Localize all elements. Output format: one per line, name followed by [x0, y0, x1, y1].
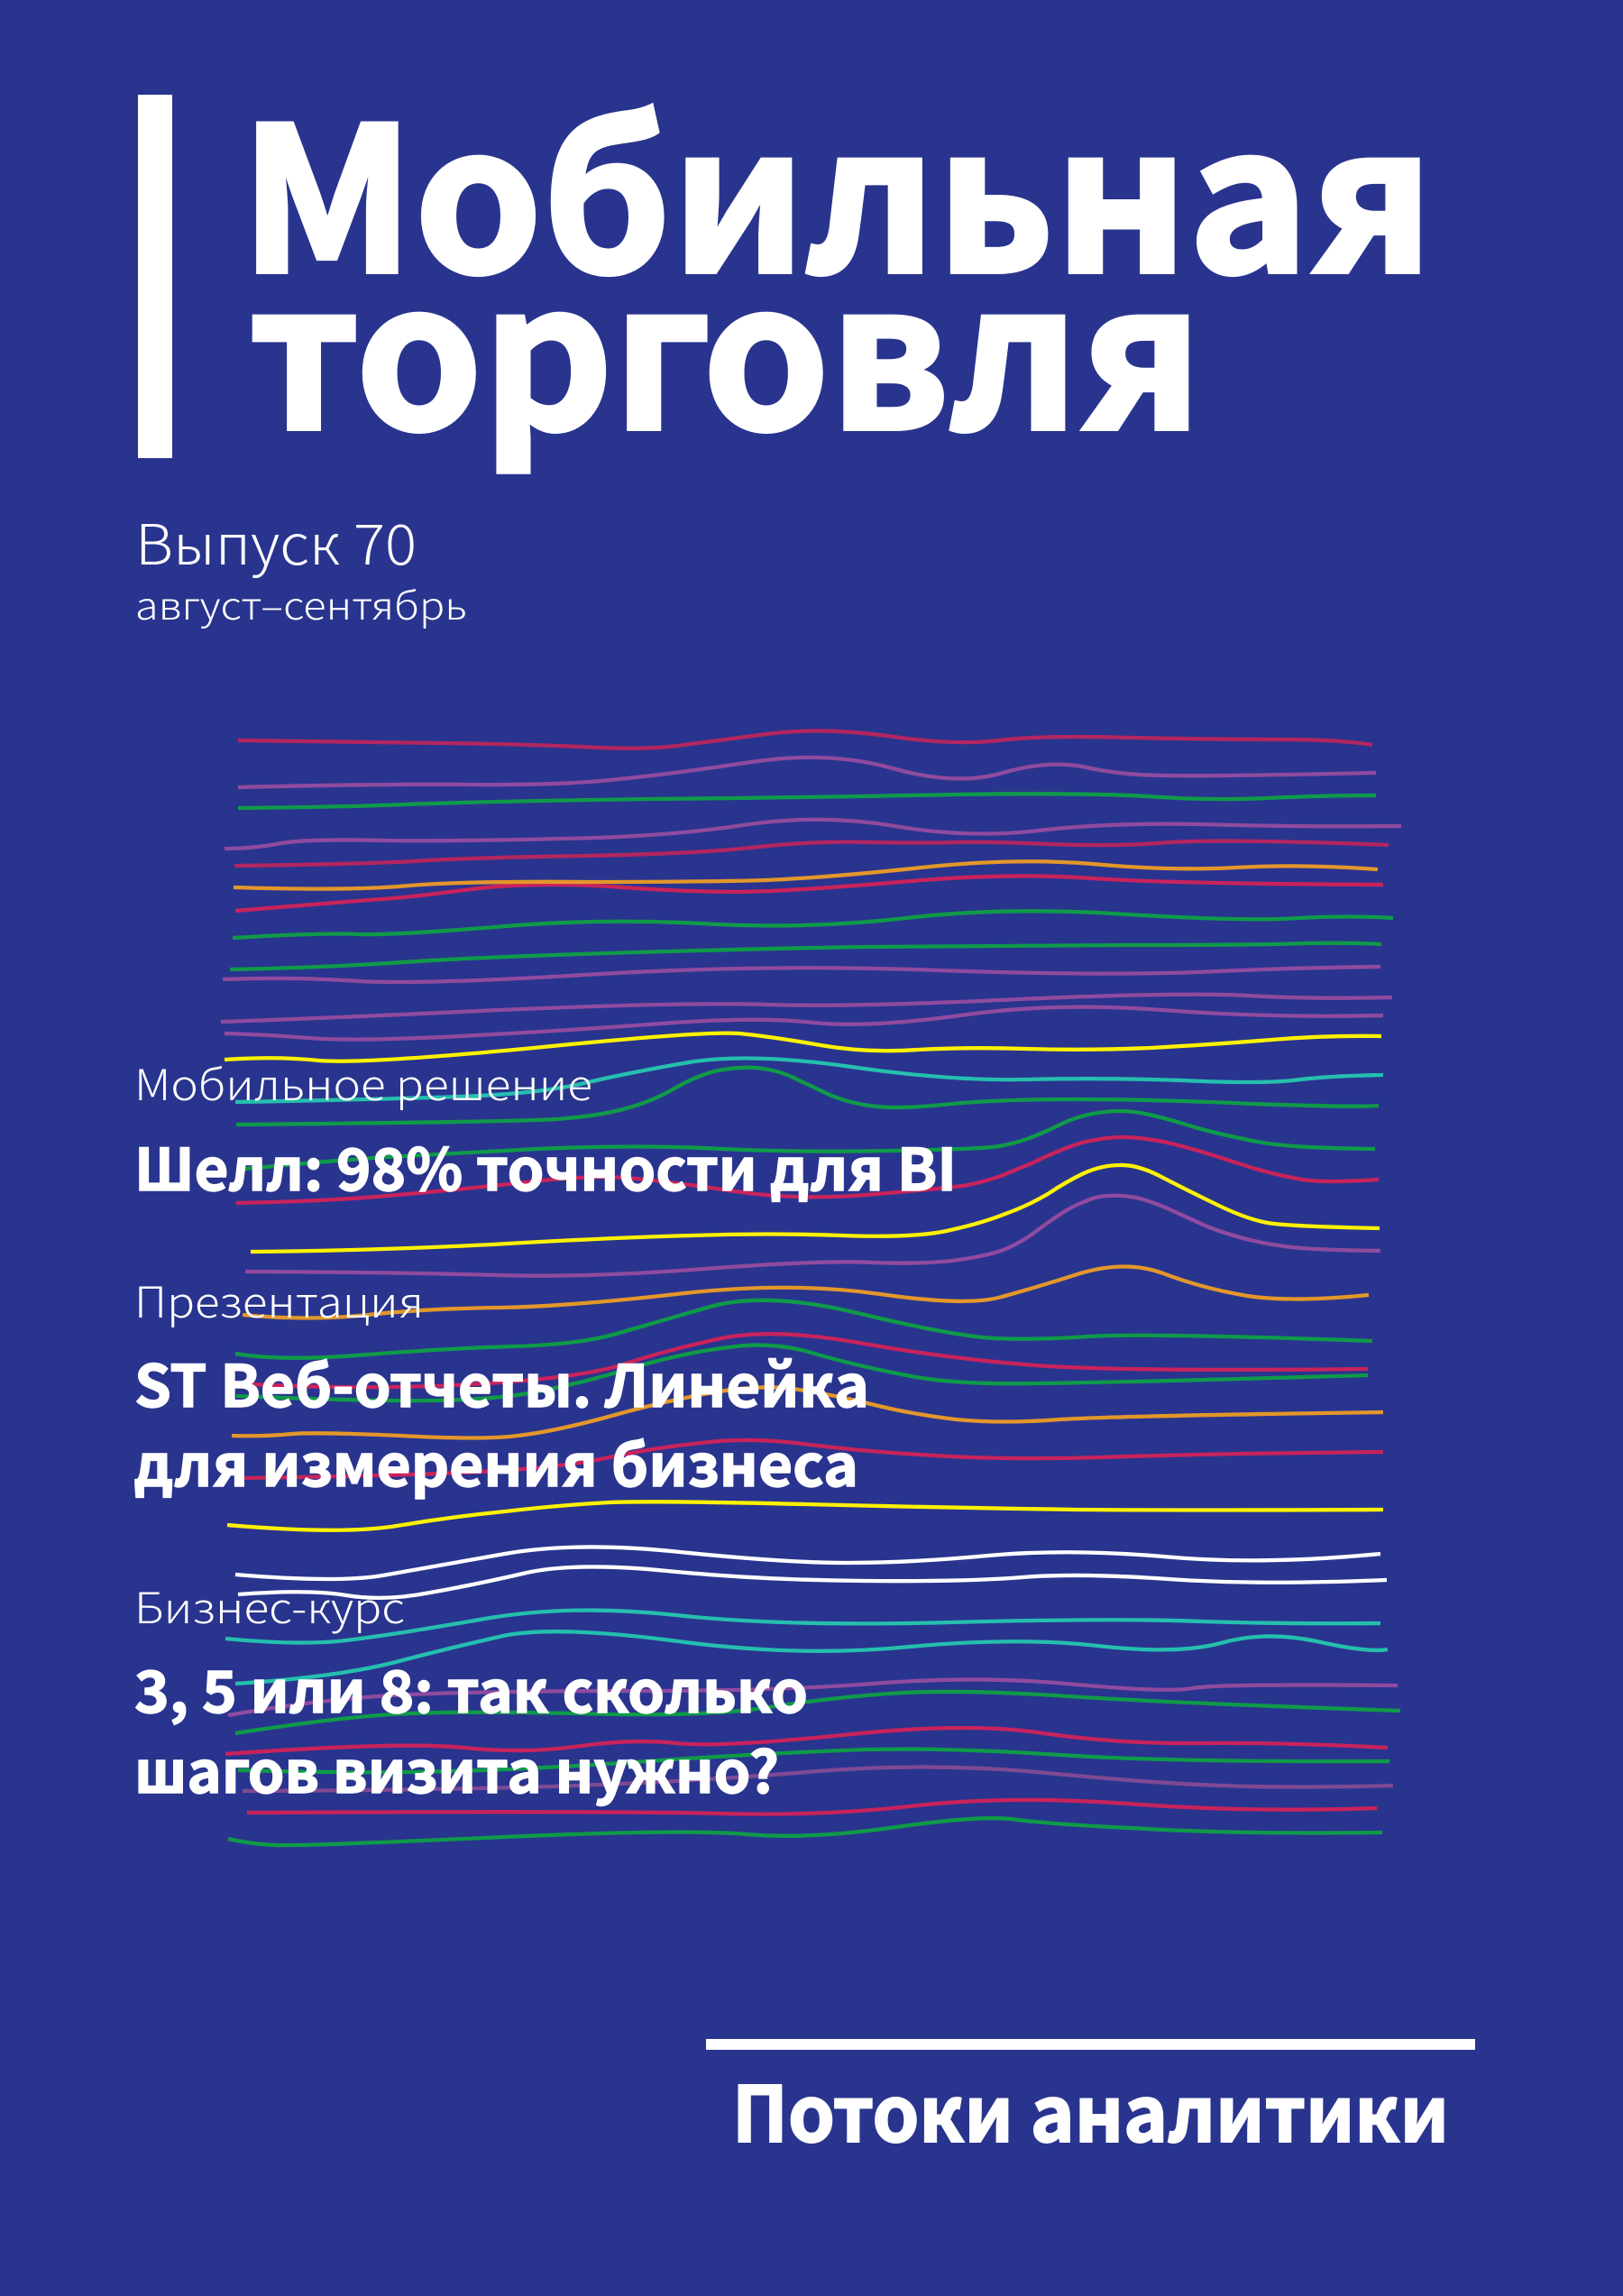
section: business course — [134, 1574, 808, 1810]
section: presentation: ST Веб-отчеты. Линейка — [134, 1341, 869, 1424]
chart: flowing analytics lines — [221, 730, 1401, 1845]
issue number and date: Выпуск 70 — [135, 500, 417, 581]
vertical title bar — [138, 95, 172, 458]
issue number and date: август–сентябрь — [135, 576, 467, 631]
title: Мобильная — [240, 40, 1434, 330]
title: торговля — [249, 197, 1203, 487]
title — [240, 40, 1434, 487]
issue number and date — [135, 500, 467, 631]
footer rule — [706, 2039, 1475, 2050]
section: mobile solution: Мобильное решение — [134, 1051, 592, 1113]
footer brand: Потоки аналитики — [732, 2053, 1449, 2164]
section: business course: шагов визита нужно? — [134, 1727, 779, 1810]
section: presentation: Презентация — [134, 1268, 424, 1330]
section: presentation — [134, 1268, 869, 1503]
section: presentation: для измерения бизнеса — [134, 1420, 858, 1503]
section: mobile solution — [134, 1051, 957, 1208]
section: business course: Бизнес-курс — [134, 1574, 405, 1636]
section: business course: 3, 5 или 8: так сколько — [134, 1647, 808, 1730]
section: mobile solution: Шелл: 98% точности для BI — [134, 1125, 957, 1208]
